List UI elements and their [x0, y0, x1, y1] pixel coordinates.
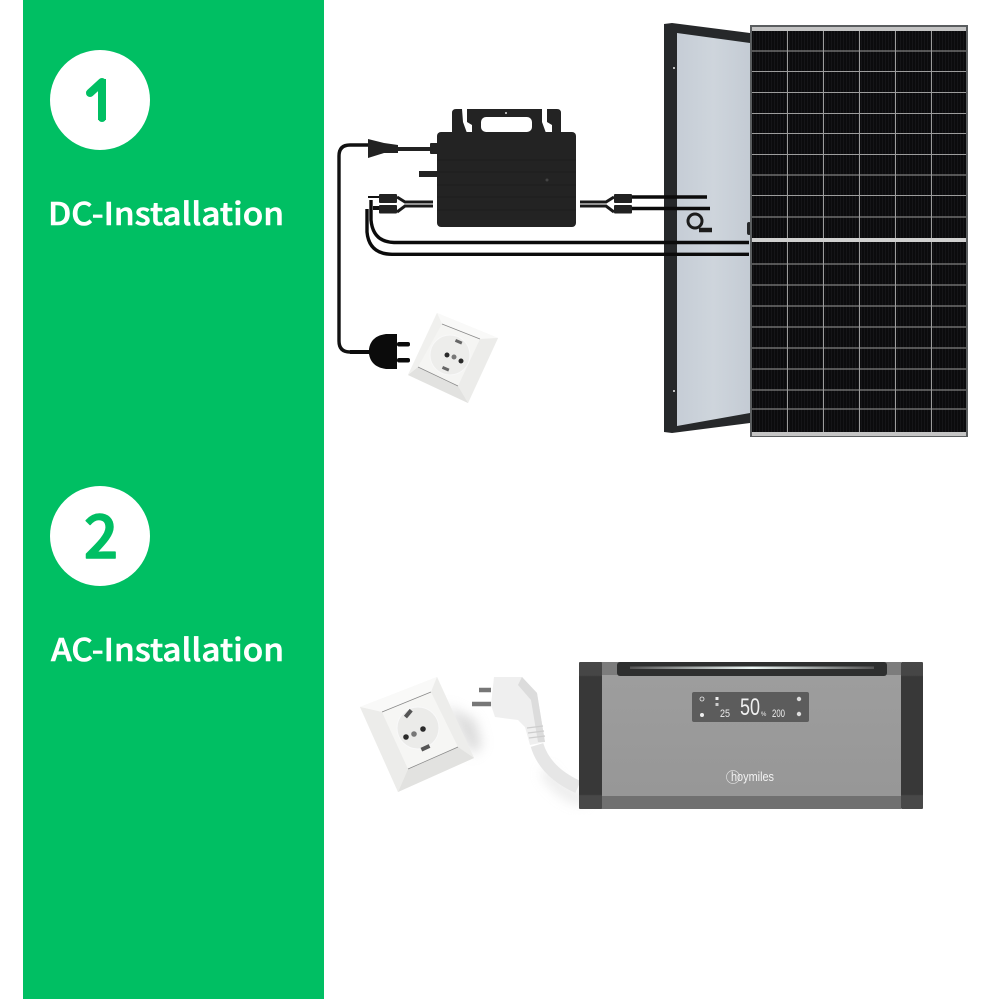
DC connectors left of inverter	[368, 194, 433, 214]
AC cable from inverter to wall plug	[339, 139, 433, 352]
battery LCD display: 25	[720, 708, 730, 720]
wall socket, DC installation	[408, 313, 498, 403]
battery LCD display	[692, 692, 809, 722]
battery end caps	[579, 662, 923, 809]
hoymiles logo: hoymiles	[731, 769, 774, 784]
battery LCD display: %	[761, 712, 767, 718]
DC connectors and cables right of inverter	[580, 194, 710, 214]
step 1 badge: 1	[85, 53, 119, 140]
heading: AC-Installation: AC-Installation	[51, 625, 284, 670]
long DC cables to panel	[367, 200, 749, 254]
battery LCD display: 200	[772, 708, 785, 720]
green sidebar panel	[23, 0, 324, 999]
step 2 badge: 2	[84, 489, 118, 576]
black wall plug	[350, 334, 410, 369]
microinverter	[419, 109, 576, 227]
solar panel back side	[664, 23, 751, 433]
battery LCD display: 50	[740, 694, 760, 721]
battery top handle	[617, 662, 887, 676]
white mains plug and cable	[472, 677, 585, 800]
coiled cable on panel back	[688, 214, 712, 230]
battery storage unit	[579, 662, 923, 809]
step 2 badge	[50, 486, 150, 586]
solar panel front with cell grid	[750, 25, 968, 437]
step 1 badge	[50, 50, 150, 150]
heading: DC-Installation: DC-Installation	[48, 189, 284, 234]
wall socket, AC installation	[360, 677, 482, 792]
